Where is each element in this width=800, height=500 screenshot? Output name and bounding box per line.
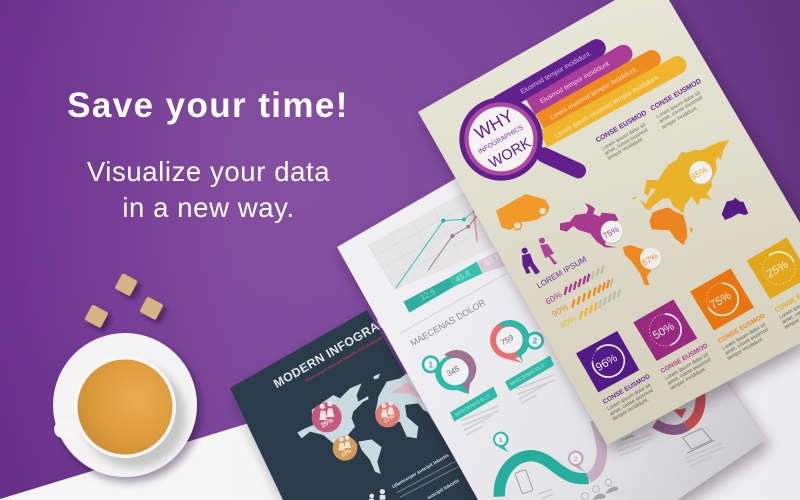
sugar cubes [85,273,163,328]
caption right [649,78,704,131]
pin 759: 759 [499,333,516,347]
pin 759 [490,320,544,363]
timeline pin one [493,432,509,452]
dark paper caption two: suscipit lobortis [426,478,460,500]
paper: cream why infographics work [418,0,800,445]
caption left: amet, conse eiusmod [604,127,649,157]
caption right: amet, conse eiusmod [658,95,704,125]
label button two: MAECENAS ELIT [509,363,547,388]
stat tile 50%: 50% [651,321,677,342]
label button one [450,387,498,422]
label button two [505,356,554,391]
pin 759: 2 [533,337,538,346]
map: north america [560,203,618,247]
paper: dark world map infographic [230,304,480,500]
stat tile 96%: 96% [594,352,620,374]
magnifier lens: INFOGRAPHICS [477,124,525,156]
stat tile 25%: 25% [765,259,790,281]
tile caption 96% [602,373,655,422]
pin 345 [422,350,476,394]
paper caption: Lorem [621,433,635,442]
world map [297,373,437,474]
magnifier lens: WORK [487,135,534,172]
paper caption [617,433,654,456]
timeline curve teal [499,456,588,497]
map: eurasia [632,140,729,213]
bar labels: Lorem eiusmod tempor incididunt. [549,65,639,122]
phone icon [515,469,533,494]
badge 85%: 85% [689,164,709,182]
caption left: CONSE EUSMOD [595,110,648,144]
tile caption 96%: tempor incididunt. [612,397,650,422]
bar labels: Eiusmod tempor incididunt. [520,50,593,96]
coffee cup on saucer [53,333,197,477]
tile caption 50%: CONSE EUSMOD [659,342,709,375]
bar labels [520,50,661,140]
value bar: 63.1 [483,252,502,268]
tile caption 96%: CONSE EUSMOD [602,373,652,406]
line chart [368,183,520,290]
laptop icon [682,428,715,453]
value bar [403,248,513,313]
icon: man [522,248,540,275]
caption right: Lorem ipsum dolor sit [656,90,702,120]
map: africa [649,207,693,245]
dark paper subtitle: Ullamcorper suscipit lobortis nisl ut aliquip [304,335,384,384]
tile caption 96%: amet, conse eiusmod [609,388,655,417]
tile caption 75% [717,312,770,362]
pictogram rows [544,266,620,331]
tile caption 50%: Lorem ipsum dolor sit [664,352,710,382]
row 40%: 40% [558,313,578,331]
truck icon [496,194,549,230]
bar labels: Eiusmod tempor incididunt. [539,60,612,105]
tile caption 75%: tempor incididunt. [727,336,765,362]
label button one: MAECENAS ELIT [454,393,492,418]
map: australia [722,198,748,220]
timeline curve mauve [588,420,602,478]
dark paper text lines [397,461,458,497]
caption right: tempor incididunt. [661,105,699,131]
bar labels: Lorem ipsum eiusmod tempor incididunt. [553,74,661,140]
tile caption 75%: amet, conse eiusmod [724,327,770,357]
magnifier handle [544,155,578,171]
timeline pin two [568,451,585,472]
tile caption 50% [659,342,712,392]
tile caption 50%: tempor incididunt. [669,366,708,392]
donut chart [654,379,702,430]
magnifier lens [459,97,543,181]
row 90%: 90% [550,302,570,319]
headline: Save your time! [67,86,349,125]
caption left: Lorem ipsum dolor sit [601,122,647,152]
value bar: 45.8 [454,268,472,284]
map marker 12%: 12% [340,448,353,459]
people icon [369,489,385,500]
stat tile 50% [633,299,697,361]
white table surface [0,255,800,500]
tile caption 75%: Lorem ipsum dolor sit [721,322,768,352]
stat tile 96% [576,331,639,392]
caption left: tempor incididunt. [607,136,645,162]
laptop caption [685,443,723,467]
subheading [87,156,330,223]
paper: white charts infographic [337,176,765,500]
people icons [582,479,618,500]
value bar: 12.5 [419,287,437,302]
dark paper caption one: Ullamcorper suscipit lobortis [391,452,450,489]
subheading: in a new way. [122,192,295,223]
stat tile 25% [747,237,800,299]
magnifier lens: WHY [471,105,517,143]
magnifier bars [498,39,686,139]
subheading: Visualize your data [87,156,330,187]
map marker 25%: 25% [320,417,335,430]
badge 75%: 75% [601,224,621,241]
lorem ipsum heading: LOREM IPSUM [535,255,588,290]
row 60%: 60% [544,289,564,307]
stat tile 75%: 75% [708,290,734,312]
map marker 17%: 17% [383,414,396,425]
map: south america [623,245,658,285]
tile caption 50%: amet, conse eiusmod [667,357,712,387]
timeline pin one: 1 [499,437,503,444]
tile caption 25% [774,291,800,331]
stat tile 75% [690,268,754,331]
pin 345: 1 [428,360,433,369]
section heading: MAECENAS DOLOR [409,297,488,348]
caption right: CONSE EUSMOD [649,78,703,113]
tile caption 96%: Lorem ipsum dolor sit [606,382,653,412]
phone caption [538,489,553,499]
timeline pin two: 2 [574,456,578,463]
badge 67%: 67% [640,250,660,268]
tile caption 75%: CONSE EUSMOD [717,312,767,345]
pin 345: 345 [445,364,462,378]
caption left [595,110,649,162]
icon: woman [539,238,557,265]
dark paper title: MODERN INFOGRAPHIC [271,304,409,391]
